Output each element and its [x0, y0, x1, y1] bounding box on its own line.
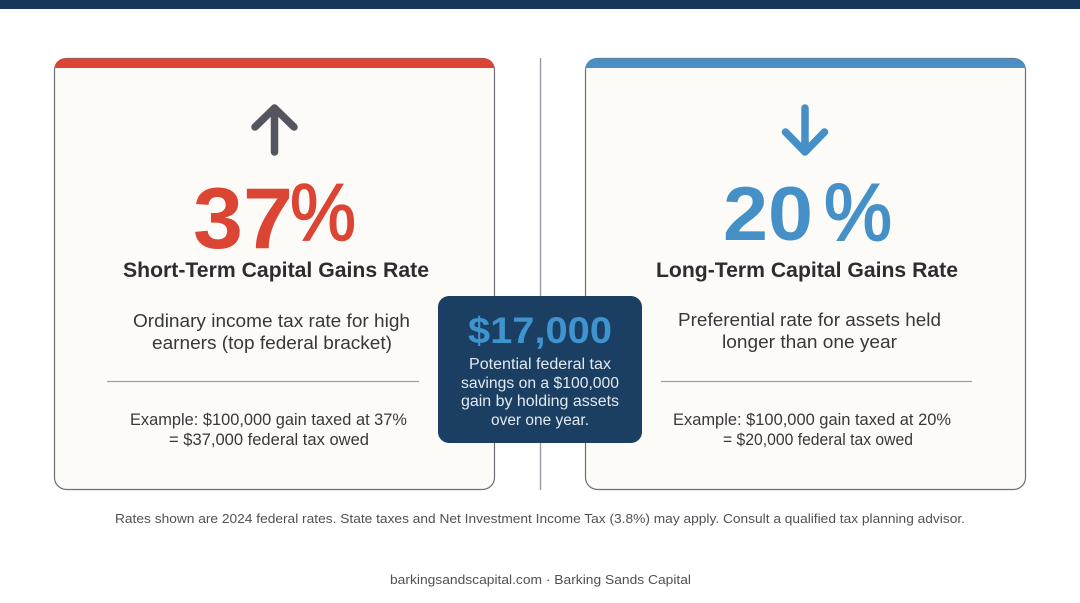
short-term heading: Short-Term Capital Gains Rate — [123, 258, 429, 282]
icon: down arrow — [786, 108, 824, 152]
short-term description: Ordinary income tax rate for high — [133, 310, 410, 331]
savings description: Potential federal tax — [469, 356, 611, 373]
top bar — [0, 0, 1080, 9]
blue top band — [586, 58, 1026, 68]
panel: short-term rate — [54, 58, 494, 489]
callout: tax savings — [438, 296, 642, 443]
long-term example: Example: $100,000 gain taxed at 20% — [673, 411, 951, 429]
long-term example: = $20,000 federal tax owed — [723, 431, 913, 449]
long-term percentage: 20 — [723, 172, 813, 257]
panel: long-term rate — [586, 58, 1026, 489]
short-term description — [133, 310, 410, 353]
savings description — [461, 356, 619, 429]
center vertical divider — [540, 58, 542, 490]
long-term percentage — [723, 168, 892, 258]
long-term description: longer than one year — [722, 331, 897, 352]
short-term description: earners (top federal bracket) — [152, 332, 392, 353]
short-term example — [130, 411, 407, 449]
long-term percentage: % — [824, 168, 892, 258]
long-term heading: Long-Term Capital Gains Rate — [656, 258, 958, 282]
icon: up arrow — [255, 108, 294, 152]
savings description: over one year. — [491, 412, 589, 429]
long-term description: Preferential rate for assets held — [678, 309, 941, 330]
red top band — [54, 58, 494, 68]
savings description: savings on a $100,000 — [461, 375, 619, 392]
short-term percentage: % — [290, 168, 356, 258]
savings description: gain by holding assets — [461, 393, 619, 410]
short-term percentage — [193, 168, 356, 267]
long-term description — [678, 309, 941, 352]
source line: barkingsandscapital.com · Barking Sands Capital — [390, 572, 691, 587]
long-term example — [673, 411, 951, 449]
short-term example: Example: $100,000 gain taxed at 37% — [130, 411, 407, 429]
short-term example: = $37,000 federal tax owed — [169, 431, 369, 449]
footnote: Rates shown are 2024 federal rates. State taxes and Net Investment Income Tax (3.8%) may apply. Consult a qualified tax planning advisor. — [115, 511, 965, 526]
short-term percentage: 37 — [193, 171, 293, 267]
savings amount: $17,000 — [468, 310, 612, 351]
